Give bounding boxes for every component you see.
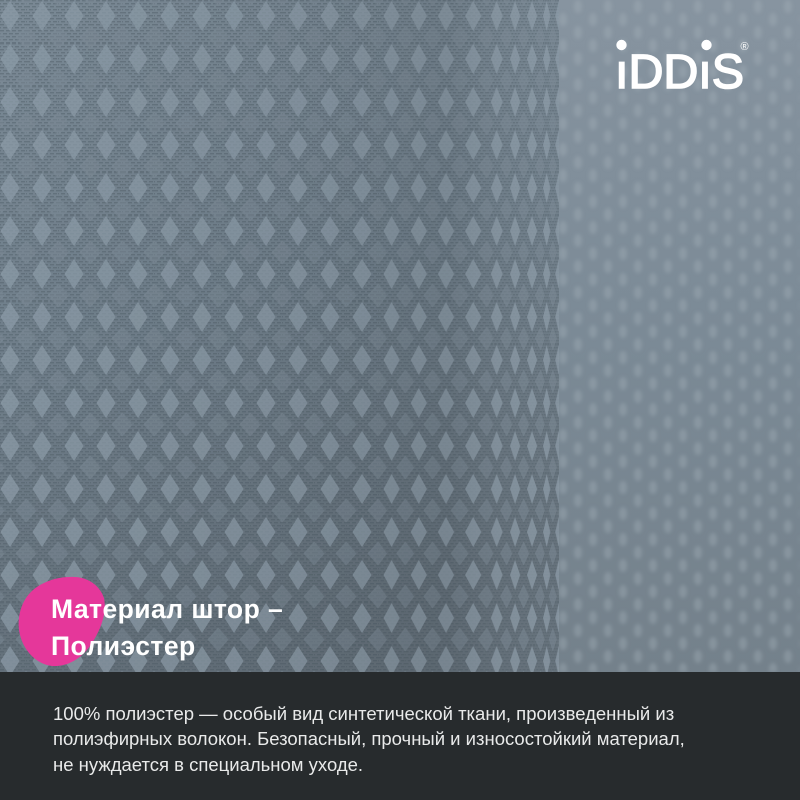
left curtain panel [0, 0, 559, 672]
footer bar [0, 672, 800, 800]
description text: не нуждается в специальном уходе. [53, 754, 363, 775]
logo: IDDIS: ® [740, 41, 749, 53]
heading [51, 594, 283, 661]
heading: Полиэстер [51, 631, 196, 661]
pink blob accent [19, 577, 105, 666]
description text [53, 703, 685, 775]
logo: IDDIS: ıDDıS [615, 46, 744, 99]
description text: 100% полиэстер — особый вид синтетической ткани, произведенный из [53, 703, 674, 724]
heading: Материал штор – [51, 594, 283, 624]
description text: полиэфирных волокон. Безопасный, прочный и износостойкий материал, [53, 728, 685, 749]
right curtain panel, out of focus [559, 0, 800, 672]
